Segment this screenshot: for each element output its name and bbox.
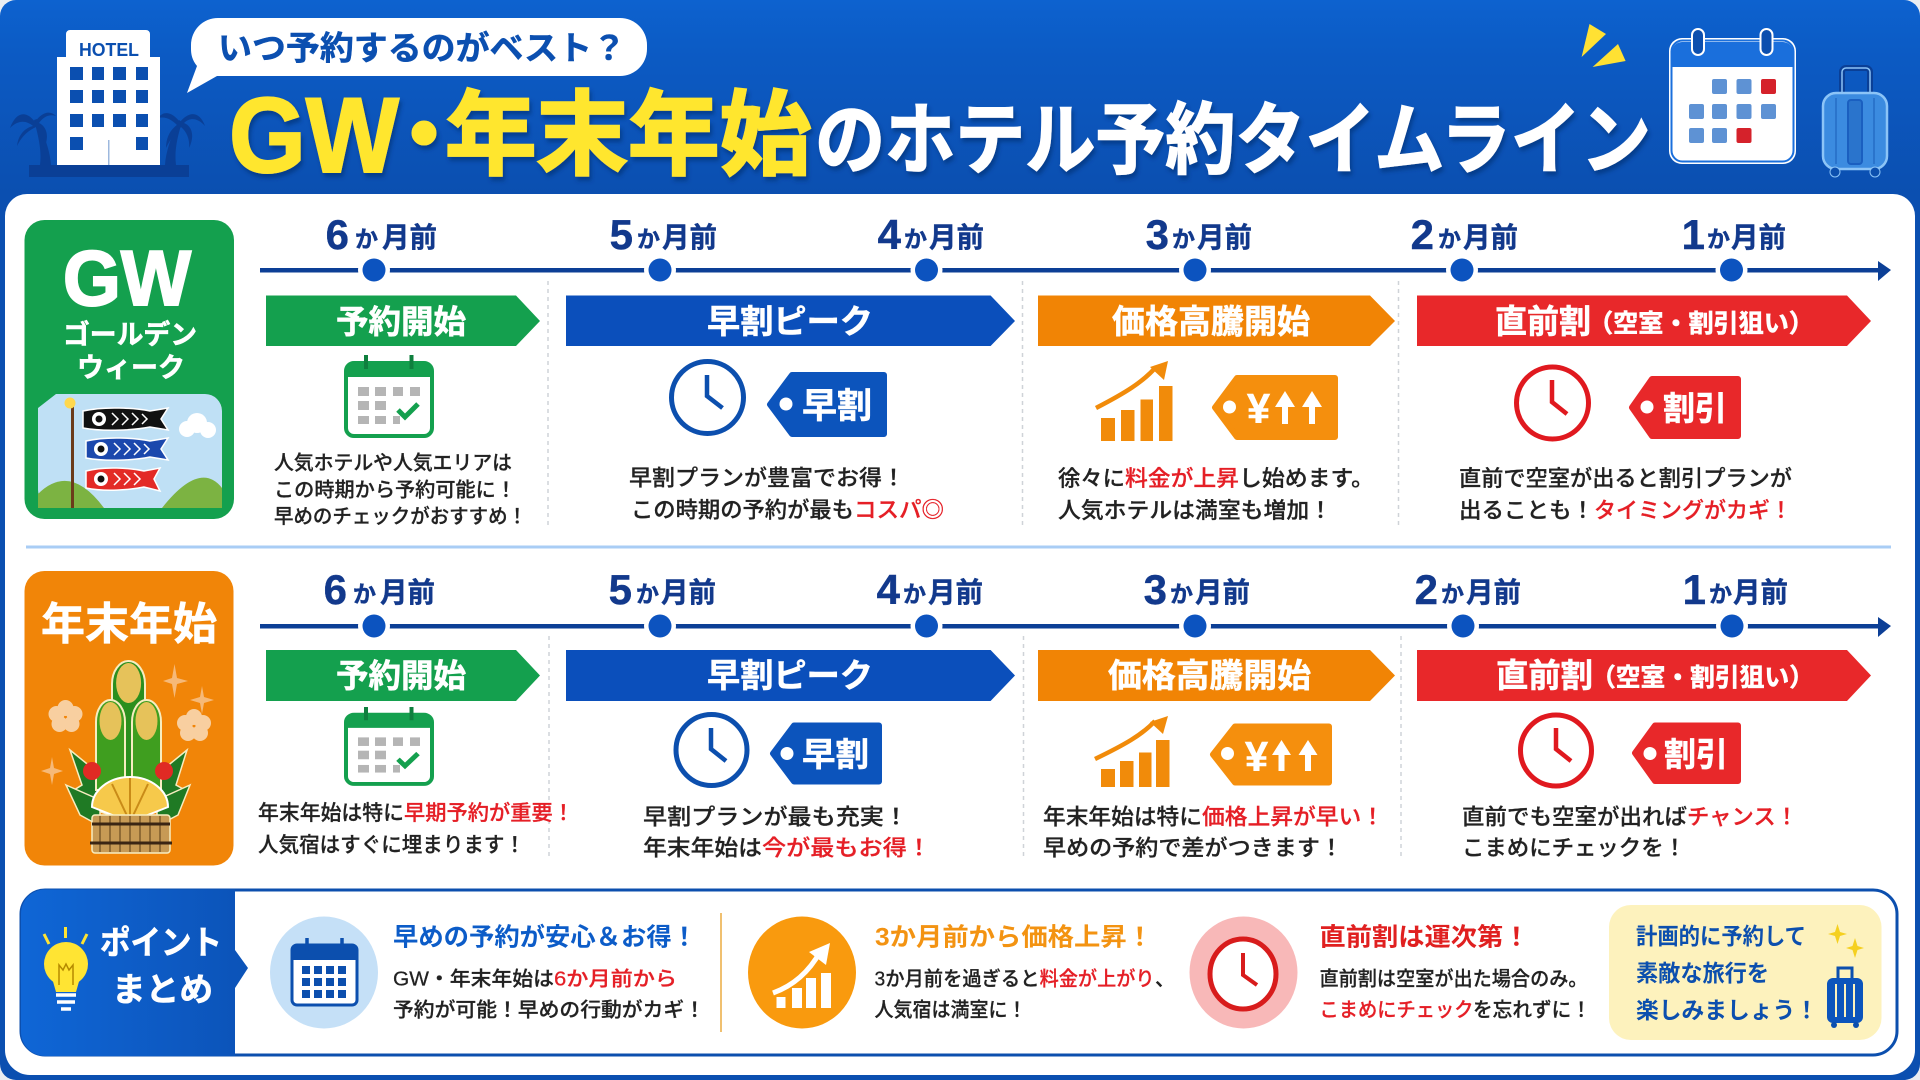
phase: 価格高騰開始 2: 価格高騰開始 xyxy=(1108,657,1311,694)
icon: 早割 tag 2: 早割 xyxy=(802,736,869,773)
phase: 早割ピーク 2: 早割ピーク xyxy=(707,657,873,694)
timeline: GW: 月前 xyxy=(382,222,437,253)
point 2 text: 人気宿は満室に！ xyxy=(874,998,1026,1022)
timeline: GW: 月前 xyxy=(1197,222,1252,253)
title: のホテル予約タイムライン xyxy=(815,96,1651,184)
phase: 直前割 2 xyxy=(1417,650,1871,701)
timeline: 年末年始: 4 xyxy=(877,566,901,613)
icon: 割引 tag xyxy=(1632,379,1738,436)
icon: 早割 tag xyxy=(770,375,884,434)
text: 早割ピーク 年末年始: 年末年始は xyxy=(643,836,762,860)
speech bubble: いつ予約するのがベスト？ xyxy=(218,30,626,66)
text: 早割ピーク 年末年始 xyxy=(643,804,931,860)
icon: 早割 tag: 早割 xyxy=(802,387,872,426)
text: 価格高騰 GW: 料金が上昇 xyxy=(1125,466,1239,491)
speech bubble xyxy=(187,18,647,93)
text: 直前割 GW: 直前で空室が出ると割引プランが xyxy=(1459,466,1792,491)
text: 直前割 GW: タイミングがカギ！ xyxy=(1594,498,1792,523)
point 1 text: 予約が可能！早めの行動がカギ！ xyxy=(393,998,705,1022)
text: 早割ピーク 年末年始: 今が最もお得！ xyxy=(762,836,931,860)
timeline: 年末年始: 月前 xyxy=(1733,577,1788,608)
timeline: 年末年始: 月前 xyxy=(1195,577,1250,608)
illustration: kadomatsu xyxy=(41,661,214,853)
timeline: 年末年始 xyxy=(260,566,1891,642)
phase: 価格高騰開始 xyxy=(1038,296,1395,346)
timeline: 年末年始: 3 xyxy=(1144,566,1167,613)
panel: GW label: GW xyxy=(63,234,191,322)
timeline: 年末年始: 6 xyxy=(324,566,347,613)
phase: 直前割: 直前割 xyxy=(1495,303,1591,340)
text: 価格高騰 GW: 人気ホテルは満室も増加！ xyxy=(1058,498,1332,523)
timeline: 年末年始: 月前 xyxy=(380,577,435,608)
point 2 text xyxy=(874,924,1175,1022)
timeline: 年末年始: 月前 xyxy=(661,577,716,608)
banner: ポイントまとめ xyxy=(21,890,248,1056)
timeline: GW: か xyxy=(1438,226,1461,252)
text: 早割ピーク 年末年始: 早割プランが最も充実！ xyxy=(643,804,908,830)
icon: hotel with palms: HOTEL xyxy=(79,40,139,60)
panel: GW label xyxy=(24,220,234,519)
text: 価格高騰 GW: し始めます。 xyxy=(1239,466,1374,491)
text: 早割ピーク GW: 早割プランが豊富でお得！ xyxy=(629,466,905,490)
timeline: GW: 月前 xyxy=(1731,222,1786,253)
phase: 予約開始 2: 予約開始 xyxy=(336,658,466,694)
timeline: GW xyxy=(260,211,1891,286)
phase: 早割ピーク xyxy=(566,296,1015,346)
text: 予約開始 GW: 早めのチェックがおすすめ！ xyxy=(274,505,527,528)
text: 早割ピーク GW: コスパ◎ xyxy=(854,498,944,522)
timeline: 年末年始: か xyxy=(353,581,376,607)
point 1 text: 早めの予約が安心＆お得！ xyxy=(393,922,697,952)
timeline: 年末年始: 月前 xyxy=(928,577,983,608)
icon: 割引 tag 2 xyxy=(1635,726,1738,781)
icon: 割引 tag 2: 割引 xyxy=(1664,736,1728,773)
text: 早割ピーク GW: この時期の予約が最も xyxy=(631,498,854,522)
timeline: GW: 3 xyxy=(1146,211,1169,258)
point 3 text: 直前割は空室が出た場合のみ。 xyxy=(1320,968,1588,990)
panel: summary xyxy=(21,890,1897,1056)
icon: yellow sparks xyxy=(1582,24,1626,67)
timeline: 年末年始: 2 xyxy=(1415,566,1438,613)
point 1 text xyxy=(393,922,705,1022)
icon: header calendar xyxy=(1669,29,1796,164)
callout: closing message: 楽しみましょう！ xyxy=(1636,997,1818,1023)
text: 直前割 年末年始: 直前でも空室が出れば xyxy=(1462,804,1687,830)
panel: GW label: ゴールデン xyxy=(63,319,197,350)
text: 直前割 年末年始: こまめにチェックを！ xyxy=(1462,836,1686,860)
timeline: GW: か xyxy=(1172,226,1195,252)
phase: 予約開始 2 xyxy=(266,650,540,701)
icon: blue clock 2 xyxy=(676,714,747,786)
text: 予約開始 年末年始 xyxy=(258,802,574,857)
phase: 予約開始 xyxy=(266,296,540,346)
icon: red clock xyxy=(1516,367,1588,439)
title: GW xyxy=(229,75,399,195)
point 2 text: 3か月前から価格上昇！ xyxy=(875,924,1153,952)
timeline: GW: 月前 xyxy=(1463,222,1518,253)
timeline: 年末年始: 月前 xyxy=(1466,577,1521,608)
icon: 割引 tag: 割引 xyxy=(1663,390,1727,427)
text: 価格高騰 年末年始: 年末年始は特に xyxy=(1043,804,1202,830)
icon: green calendar 2 xyxy=(346,707,432,784)
icon: header suitcase xyxy=(1823,68,1887,177)
icon: price up tag xyxy=(1215,378,1335,437)
point 2 text: 3か月前を過ぎると xyxy=(874,968,1040,990)
title: 年末年始 xyxy=(445,85,811,187)
panel: GW label: ウィーク xyxy=(77,353,185,383)
phase: 価格高騰開始 2 xyxy=(1038,650,1395,701)
timeline: 年末年始: か xyxy=(636,581,659,607)
banner: ポイントまとめ: ポイント xyxy=(100,924,222,961)
phase: 直前割: （空室・割引狙い） xyxy=(1588,310,1814,338)
text: 直前割 年末年始: チャンス！ xyxy=(1687,804,1798,830)
icon: 早割 tag 2 xyxy=(773,726,879,782)
phase: 価格高騰開始: 価格高騰開始 xyxy=(1112,303,1310,340)
text: 直前割 GW: 出ることも！ xyxy=(1459,498,1594,523)
point 1 text: 6か月前から xyxy=(554,968,677,990)
illustration: koinobori xyxy=(38,394,222,508)
timeline: GW: 1 xyxy=(1682,211,1705,258)
title xyxy=(229,75,1651,195)
phase: 直前割 2: 直前割 xyxy=(1496,657,1593,694)
point 3 text: こまめにチェック xyxy=(1320,998,1474,1022)
text: 予約開始 年末年始: 人気宿はすぐに埋まります！ xyxy=(258,834,525,857)
icon: summary calendar xyxy=(270,916,378,1028)
text: 価格高騰 年末年始: 価格上昇が早い！ xyxy=(1202,804,1384,830)
text: 予約開始 年末年始: 年末年始は特に xyxy=(258,802,404,825)
callout: closing message xyxy=(1609,905,1882,1040)
title: ・ xyxy=(379,87,469,187)
icon: price up tag 2: ¥ xyxy=(1245,733,1269,780)
phase: 早割ピーク: 早割ピーク xyxy=(707,303,873,340)
timeline: 年末年始: か xyxy=(903,581,926,607)
timeline: GW: か xyxy=(904,226,927,252)
icon: price up tag 2 xyxy=(1213,726,1329,782)
point 1 text: GW・年末年始は xyxy=(393,968,554,990)
timeline: 年末年始: か xyxy=(1170,581,1193,607)
timeline: GW: 6 xyxy=(326,211,349,258)
text: 予約開始 GW xyxy=(274,452,527,528)
icon: blue clock xyxy=(672,362,744,434)
text: 直前割 GW xyxy=(1459,466,1792,523)
panel: 年末年始 label xyxy=(24,571,234,866)
text: 予約開始 年末年始: 早期予約が重要！ xyxy=(404,802,574,825)
point 3 text: 直前割は運次第！ xyxy=(1320,924,1530,952)
point 2 text: 、 xyxy=(1155,968,1175,990)
text: 直前割 年末年始 xyxy=(1462,804,1798,860)
text: 価格高騰 年末年始: 早めの予約で差がつきます！ xyxy=(1043,836,1343,860)
phase: 直前割 2: （空室・割引狙い） xyxy=(1591,664,1814,692)
phase: 直前割 xyxy=(1417,296,1871,346)
icon: orange rising chart xyxy=(1096,361,1172,441)
icon: price up tag: ¥ xyxy=(1247,385,1271,432)
point 3 text xyxy=(1320,924,1591,1022)
timeline: GW: か xyxy=(355,226,378,252)
icon: summary clock xyxy=(1190,916,1298,1028)
text: 早割ピーク GW xyxy=(629,466,944,522)
banner: ポイントまとめ: まとめ xyxy=(112,971,213,1008)
point 3 text: を忘れずに！ xyxy=(1473,998,1591,1022)
icon: green calendar xyxy=(346,355,432,436)
timeline: 年末年始: 1 xyxy=(1683,566,1706,613)
timeline: GW: 月前 xyxy=(929,222,984,253)
text: 価格高騰 年末年始 xyxy=(1043,804,1384,860)
icon: red clock 2 xyxy=(1520,715,1592,786)
icon: summary rising chart xyxy=(748,916,856,1028)
timeline: 年末年始: か xyxy=(1441,581,1464,607)
text: 価格高騰 GW: 徐々に xyxy=(1058,466,1125,491)
timeline: GW: か xyxy=(637,226,660,252)
callout: closing message: 計画的に予約して xyxy=(1636,923,1806,949)
timeline: GW: か xyxy=(1707,226,1730,252)
icon: hotel with palms xyxy=(10,30,205,177)
phase: 予約開始: 予約開始 xyxy=(336,304,466,340)
text: 予約開始 GW: 人気ホテルや人気エリアは xyxy=(274,452,512,474)
point 2 text: 料金が上がり xyxy=(1040,968,1155,990)
callout: closing message: 素敵な旅行を xyxy=(1636,960,1769,986)
panel: 年末年始 label: 年末年始 xyxy=(41,600,217,649)
timeline: GW: 4 xyxy=(878,211,902,258)
timeline: GW: 月前 xyxy=(662,222,717,253)
text: 価格高騰 GW xyxy=(1058,466,1374,523)
timeline: GW: 5 xyxy=(610,211,633,258)
header xyxy=(10,18,1887,195)
text: 予約開始 GW: この時期から予約可能に！ xyxy=(274,478,516,502)
timeline: 年末年始: 5 xyxy=(609,566,632,613)
icon: orange rising chart 2 xyxy=(1095,716,1170,787)
timeline: 年末年始: か xyxy=(1709,581,1732,607)
timeline: GW: 2 xyxy=(1411,211,1434,258)
phase: 早割ピーク 2 xyxy=(566,650,1015,701)
